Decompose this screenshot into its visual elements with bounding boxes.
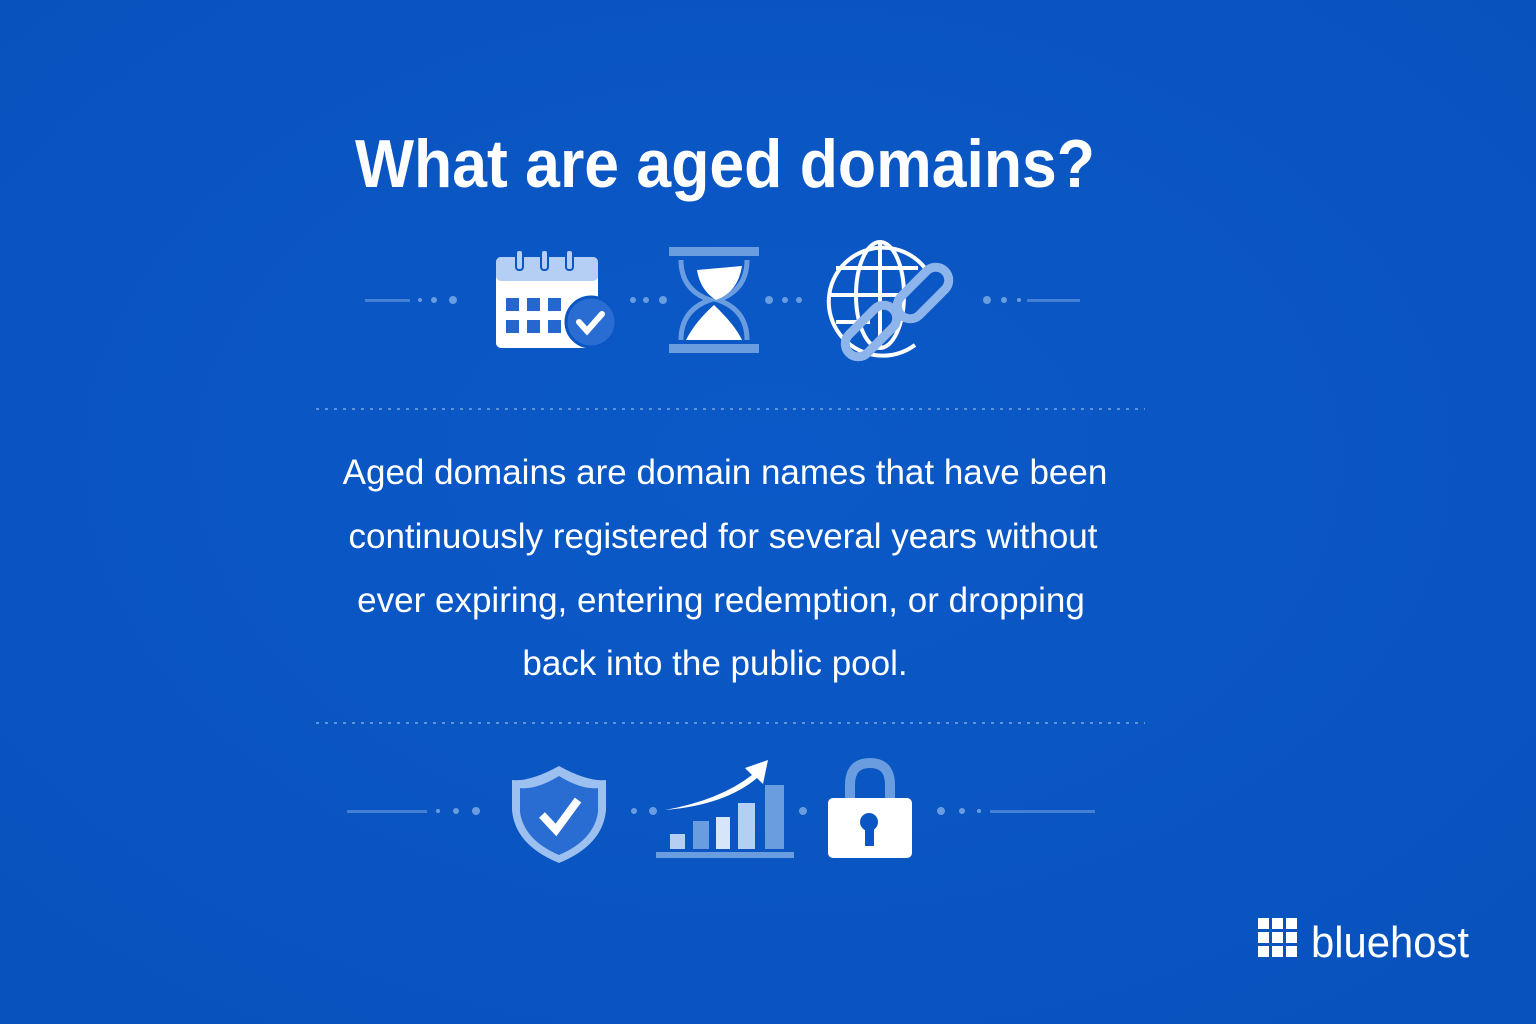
bottom icon row bbox=[347, 760, 1095, 863]
icon: growth chart bbox=[656, 760, 794, 858]
icon: calendar bbox=[496, 250, 616, 348]
icon: shield bbox=[512, 766, 606, 863]
body text bbox=[343, 453, 1107, 683]
divider top bbox=[316, 408, 1145, 410]
body text: continuously registered for several years without bbox=[349, 517, 1098, 556]
title: What are aged domains? bbox=[355, 126, 1095, 202]
icon: globe with link bbox=[828, 242, 954, 362]
body text: ever expiring, entering redemption, or dropping bbox=[357, 581, 1085, 620]
logo: bluehost: bluehost bbox=[1311, 918, 1469, 967]
body text: back into the public pool. bbox=[522, 644, 908, 683]
top icon row bbox=[365, 242, 1080, 362]
icon: hourglass bbox=[669, 247, 759, 353]
divider bottom bbox=[316, 722, 1145, 724]
body text: Aged domains are domain names that have been bbox=[343, 453, 1107, 492]
icon: padlock bbox=[828, 763, 912, 858]
